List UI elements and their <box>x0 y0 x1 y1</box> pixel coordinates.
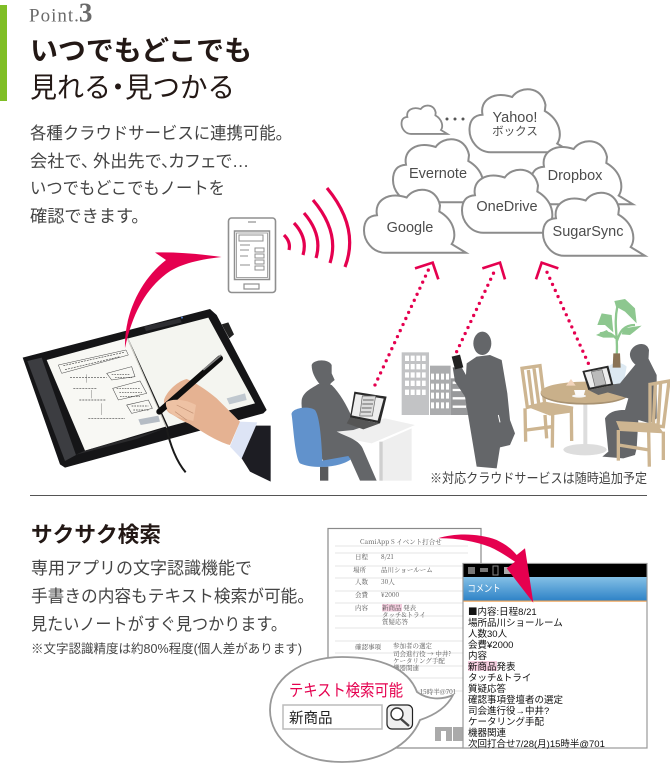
comment lines <box>468 604 605 750</box>
cloud: Yahoo: ボックス <box>492 125 538 138</box>
chair post <box>320 467 328 481</box>
phone screen: コメント <box>468 584 500 595</box>
handwritten note page: ケータリング手配 <box>393 656 445 665</box>
office scene and buildings <box>292 352 471 481</box>
handwritten note page: 新商品 発表 <box>382 603 417 612</box>
search speech bubble <box>270 657 453 762</box>
icon: wireless signal arcs <box>284 188 350 267</box>
handwritten note page: ¥2000 <box>380 590 399 599</box>
suit sleeve <box>242 426 271 482</box>
comment lines: 内容 <box>468 650 488 662</box>
cloud: Yahoo <box>470 89 572 152</box>
cloud: Google <box>364 190 466 253</box>
dots after small cloud <box>446 118 464 120</box>
cloud: Evernote: Evernote <box>409 166 467 182</box>
handwritten note page <box>328 528 481 748</box>
comment lines: 司会進行役→中井? <box>468 705 549 717</box>
handwritten note page: 15時半@701 <box>420 687 456 696</box>
comment lines: 場所品川ショールーム <box>468 617 563 629</box>
hand <box>164 379 240 445</box>
title: いつでもどこでも <box>30 35 252 66</box>
laptop <box>350 392 387 423</box>
search hit highlight <box>468 661 497 671</box>
comment lines: 人数30人 <box>468 628 508 640</box>
seated person <box>630 344 649 366</box>
comment lines: ■内容:日程8/21 <box>468 604 537 618</box>
search description text: 見たいノートがすぐ見つかります。 <box>31 615 287 634</box>
cloud: small <box>402 106 447 134</box>
intro text block: カフェで <box>168 151 231 171</box>
comment lines: 会費¥2000 <box>468 639 513 651</box>
handwritten note page: 司会進行役 → 中井? <box>393 649 451 658</box>
intro text block: … <box>232 151 249 171</box>
cloud: OneDrive <box>462 170 564 233</box>
buildings <box>402 352 471 415</box>
handwritten note page: 品川ショールーム <box>381 565 433 574</box>
green accent bar <box>0 5 7 101</box>
search box <box>283 705 382 729</box>
cloud: SugarSync <box>543 193 645 256</box>
intro text block: 外出先で、 <box>93 151 178 171</box>
cloud: Dropbox <box>531 141 633 204</box>
dotted arrows to cloud <box>375 263 588 385</box>
handwritten note page: 内容 <box>355 603 368 612</box>
dotted arrow: outdoors <box>457 263 505 352</box>
dotted arrow: office <box>375 263 438 385</box>
accuracy note: ※文字認識精度は約80%程度(個人差があります) <box>31 641 302 656</box>
dotted arrow: cafe <box>536 263 588 363</box>
cloud: Evernote <box>393 139 495 202</box>
search description text: 専用アプリの文字認識機能で <box>31 559 252 578</box>
handwritten note page: 参加者の選定 <box>393 641 432 650</box>
notebook photo with hand <box>23 309 271 482</box>
search button <box>387 705 412 729</box>
cloud: Google: Google <box>387 220 433 236</box>
right page <box>128 318 255 427</box>
handwritten note page: 機器関連 <box>393 663 420 672</box>
cloud services note: ※対応クラウドサービスは随時追加予定 <box>430 471 647 486</box>
laptop <box>582 366 613 390</box>
right chair <box>618 381 669 467</box>
bubble heading: テキスト検索可能 <box>289 682 403 700</box>
pen <box>159 358 220 412</box>
title: 見つかる <box>125 72 235 103</box>
left page <box>47 338 166 451</box>
comment lines: タッチ&トライ <box>468 673 531 684</box>
cloud: Dropbox: Dropbox <box>548 168 603 184</box>
intro text block: 確認できます。 <box>30 206 149 226</box>
handwritten note page: CamiApp S イベント打合せ <box>360 537 442 546</box>
handwritten note page: 人数 <box>355 577 368 586</box>
intro text block: いつでもどこでもノートを <box>30 178 225 198</box>
cloud group <box>364 89 645 256</box>
search speech bubble: 新商品 <box>289 710 332 727</box>
title: ・ <box>104 72 132 103</box>
status bar <box>464 564 646 577</box>
left chair <box>522 366 572 448</box>
comment lines: 次回打合せ7/28(月)15時半@701 <box>468 738 605 750</box>
handwritten note page: 30人 <box>381 577 395 586</box>
cafe scene <box>522 299 669 467</box>
seated person <box>312 360 335 389</box>
handwriting <box>58 350 152 418</box>
desk <box>382 428 412 481</box>
plant <box>600 307 635 355</box>
comment lines: 確認事項登壇者の選定 <box>468 694 564 706</box>
shirt cuff <box>230 422 257 459</box>
handwritten note page: 会費 <box>355 590 368 599</box>
handwritten note page: タッチ&トライ <box>382 610 426 619</box>
handwritten note page: 8/21 <box>381 552 394 561</box>
notebook cover <box>23 309 267 468</box>
cloud: Yahoo: Yahoo! <box>493 110 537 126</box>
office chair <box>292 408 351 467</box>
title <box>30 35 252 103</box>
handwritten note page: 日程 <box>355 552 368 561</box>
icon: tablet <box>228 218 276 292</box>
table <box>583 403 587 445</box>
section heading: search: サクサク検索 <box>31 522 161 547</box>
standing person with phone <box>452 332 515 468</box>
cable <box>167 428 186 472</box>
intro text block: 各種クラウドサービスに連携可能。 <box>30 123 292 143</box>
handwritten note page: 場所 <box>353 565 366 574</box>
phone screen <box>463 564 647 750</box>
cloud: SugarSync: SugarSync <box>553 224 623 240</box>
cloud: OneDrive: OneDrive <box>476 199 538 215</box>
handwritten note page: 確認事項 <box>355 642 382 651</box>
arrow: notebook to tablet <box>125 252 222 348</box>
comment lines: 機器関連 <box>468 727 507 739</box>
search description text: 手書きの内容もテキスト検索が可能。 <box>31 587 314 606</box>
comment lines: ケータリング手配 <box>468 716 545 728</box>
page buttons <box>138 416 160 425</box>
intro text block <box>30 123 292 226</box>
comment lines: 質疑応答 <box>468 683 507 695</box>
search description text <box>31 559 314 634</box>
fingers over pen <box>166 400 196 421</box>
arrow: note to phone <box>438 535 533 603</box>
intro text block: 会社で、 <box>30 151 98 171</box>
comment lines: 新商品発表 <box>468 661 516 673</box>
cup and napkin <box>566 379 576 386</box>
handwritten note page: 質疑応答 <box>382 617 408 626</box>
title: 見れる <box>30 72 111 103</box>
